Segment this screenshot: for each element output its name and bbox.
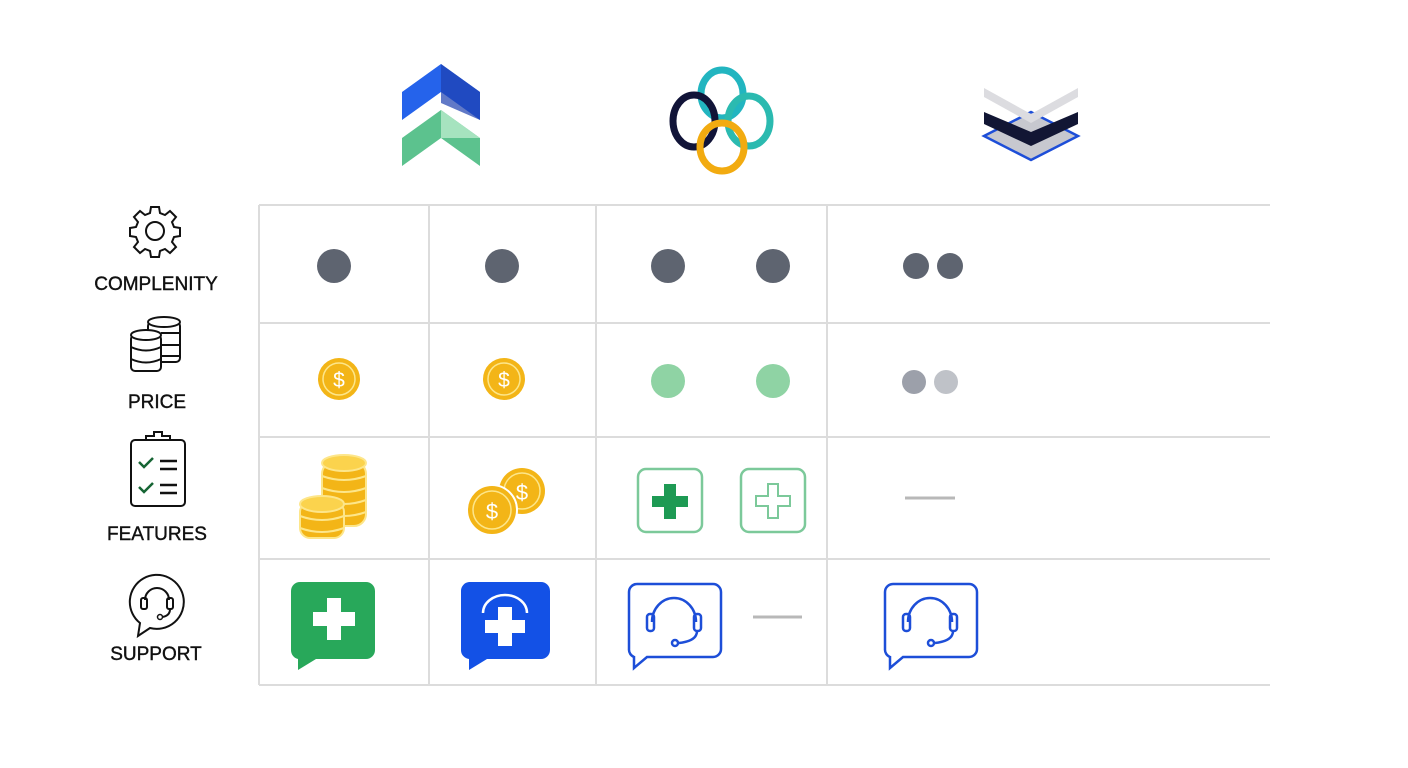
logo: layers xyxy=(984,88,1078,160)
price icons: $ xyxy=(333,369,345,392)
support: blue bubble xyxy=(461,582,550,670)
row label: features xyxy=(107,432,207,545)
row label: complexity: COMPLENITY xyxy=(94,274,218,295)
price icons xyxy=(318,358,958,400)
row label: support xyxy=(110,575,202,665)
row label: features: FEATURES xyxy=(107,524,207,545)
features: plus boxes xyxy=(638,469,955,532)
support: headset bubbles xyxy=(629,584,977,668)
row label: support: SUPPORT xyxy=(110,644,202,665)
table grid xyxy=(259,205,1270,685)
support dash xyxy=(753,616,802,618)
row label: price xyxy=(128,317,186,413)
features: two coins xyxy=(467,468,545,535)
support: green bubble xyxy=(291,582,375,670)
logo: chevrons xyxy=(402,64,480,166)
row label: price: PRICE xyxy=(128,392,186,413)
features: coin stacks xyxy=(300,455,366,538)
features: two coins: $ xyxy=(516,480,528,505)
row label: complexity xyxy=(94,207,218,295)
price icons: $ xyxy=(498,369,510,392)
logo: rings xyxy=(673,70,770,171)
complexity dots xyxy=(317,249,963,283)
features: two coins: $ xyxy=(486,499,498,524)
